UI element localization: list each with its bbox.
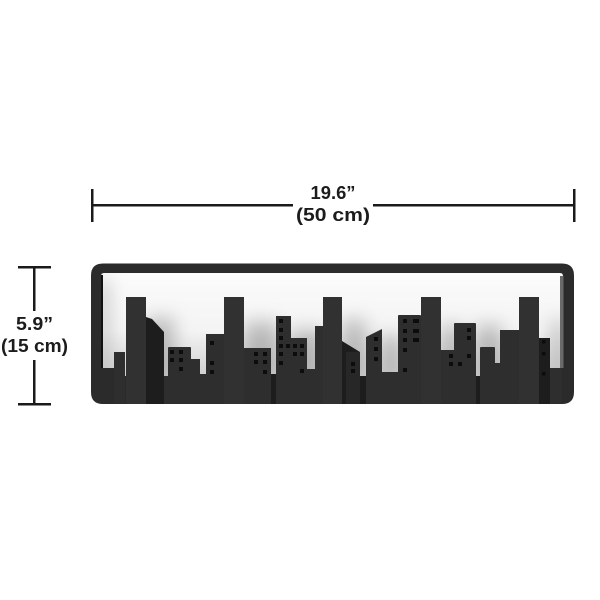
buildings: recessed — [146, 317, 550, 404]
frame — [91, 264, 574, 404]
width dimension: (50 cm) — [296, 205, 370, 225]
height dimension: (15 cm) — [1, 336, 68, 356]
buildings: front — [114, 315, 562, 404]
windows — [170, 319, 546, 376]
frame inner shading — [560, 276, 564, 368]
height dimension — [1, 266, 68, 406]
base end blocks — [101, 368, 564, 378]
width dimension — [91, 183, 576, 225]
wall hook rack — [91, 264, 574, 404]
wall shadow — [98, 273, 564, 378]
width dimension: 19.6” — [310, 183, 356, 203]
tall towers — [126, 297, 539, 404]
height dimension: 5.9” — [16, 314, 53, 334]
